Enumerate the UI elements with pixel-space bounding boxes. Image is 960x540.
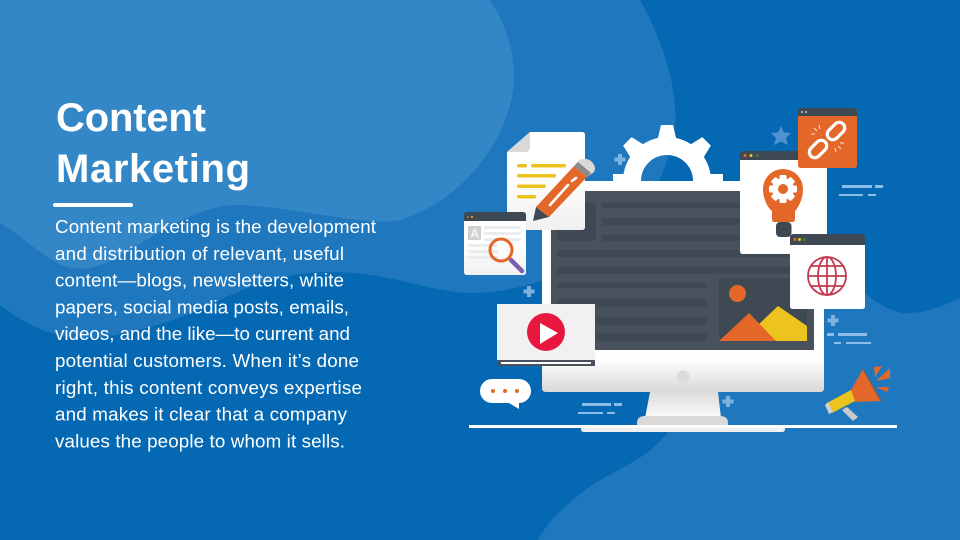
- icon: video player: [497, 304, 595, 366]
- body text: values the people to whom it sells.: [55, 430, 345, 451]
- icon: star: [771, 126, 791, 145]
- icon: megaphone: [825, 366, 890, 421]
- monitor body: [542, 181, 824, 392]
- icon: speech bubble: [480, 379, 531, 409]
- icon: search window: A: [470, 226, 480, 241]
- body text: right, this content conveys expertise: [55, 377, 362, 398]
- decorative plus signs: [524, 154, 838, 407]
- body text: papers, social media posts, emails,: [55, 296, 349, 317]
- icon: gear behind monitor: [613, 125, 723, 216]
- icon: globe window: [790, 234, 865, 309]
- title: Content: [56, 96, 206, 140]
- body text: [55, 216, 377, 451]
- monitor base: [581, 428, 785, 432]
- monitor screen: [551, 191, 814, 350]
- decorative dashes: [578, 185, 883, 414]
- icon: document with pencil: [507, 132, 595, 230]
- body text: and makes it clear that a company: [55, 404, 348, 425]
- power button: [676, 370, 690, 384]
- body text: videos, and the like—to current and: [55, 323, 350, 344]
- image placeholder: [719, 278, 807, 341]
- body text: potential customers. When it’s done: [55, 350, 359, 371]
- monitor: [469, 181, 897, 432]
- title: [56, 96, 250, 191]
- monitor stand: [645, 392, 721, 418]
- icon: broken link window: [798, 108, 857, 168]
- body text: and distribution of relevant, useful: [55, 243, 344, 264]
- title: Marketing: [56, 147, 250, 191]
- body text: content—blogs, newsletters, white: [55, 270, 344, 291]
- title underline: [53, 203, 133, 207]
- monitor foot: [637, 416, 728, 426]
- icon: search window: [464, 212, 526, 275]
- desk line: [469, 425, 897, 428]
- icon: light bulb window: [740, 151, 827, 254]
- body text: Content marketing is the development: [55, 216, 377, 237]
